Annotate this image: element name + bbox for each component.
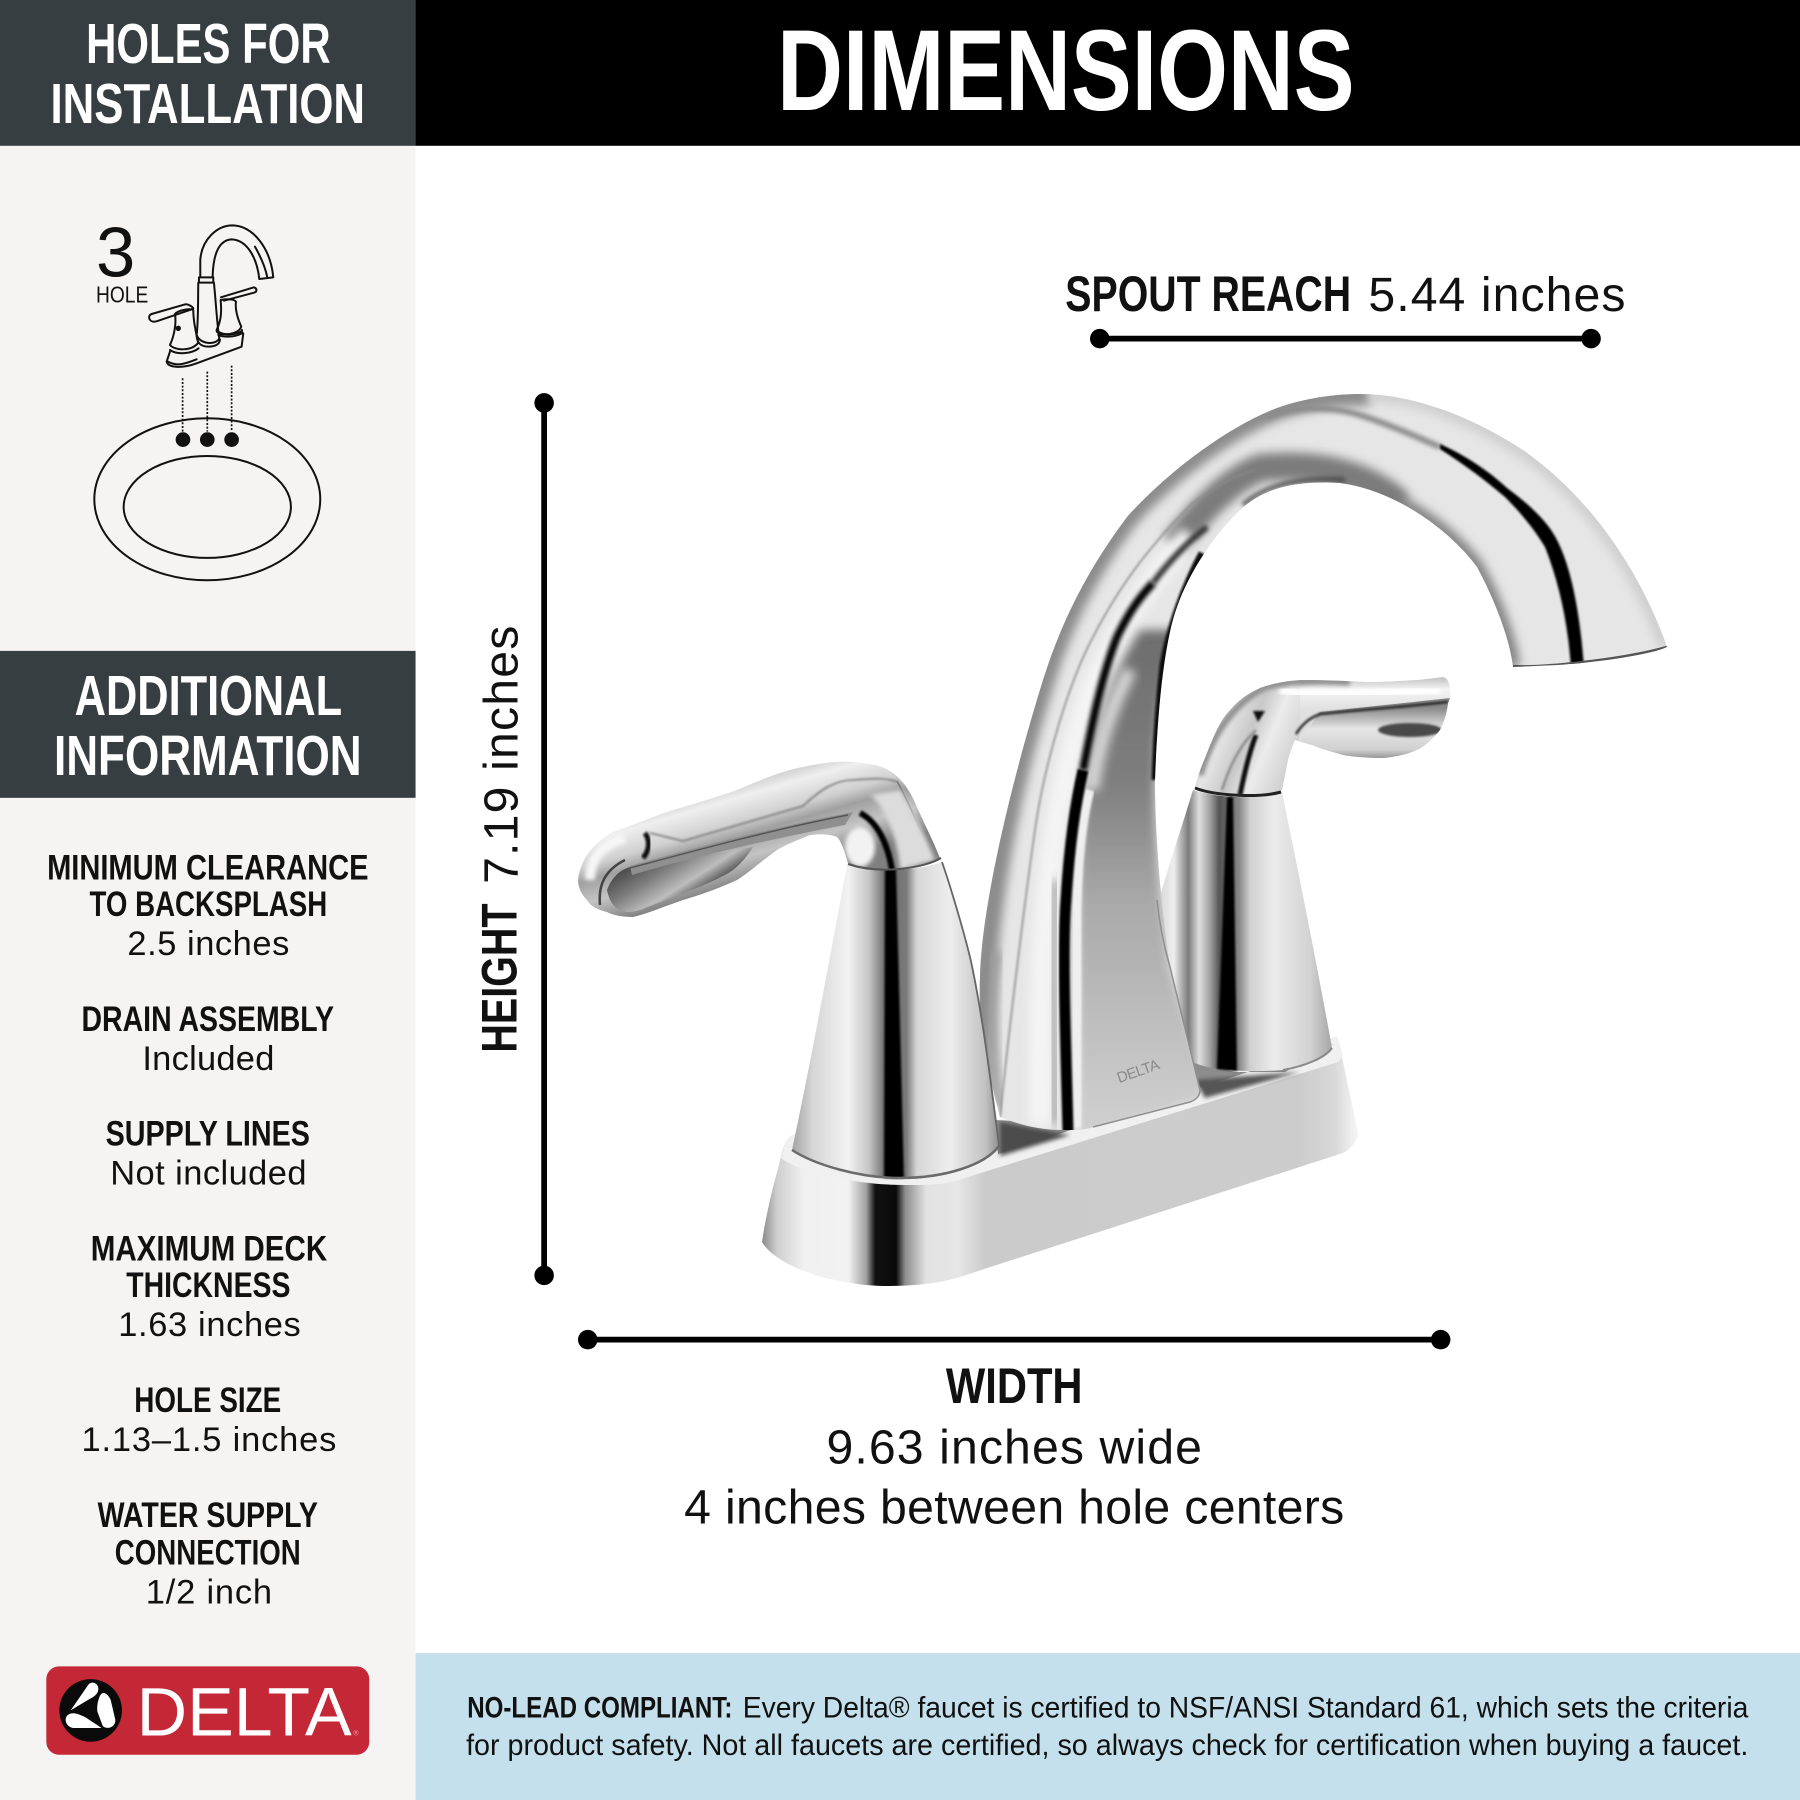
spec: maximum deck thickness: 1.63 inches [118, 1306, 301, 1344]
logo: delta: DELTA [137, 1674, 352, 1751]
spec: water supply connection: 1/2 inch [146, 1574, 272, 1612]
spec: maximum deck thickness: MAXIMUM DECK [91, 1228, 327, 1268]
heading: holes for installation: INSTALLATION [51, 72, 365, 135]
spec: minimum clearance [47, 847, 368, 963]
dimension: height: 7.19 inches [475, 626, 529, 884]
heading: additional information: INFORMATION [54, 724, 362, 787]
icon: three hole faucet installation: HOLE [96, 281, 148, 307]
heading: holes for installation: HOLES FOR [86, 12, 331, 75]
spec: minimum clearance: 2.5 inches [127, 925, 289, 963]
spec: drain assembly [82, 999, 334, 1078]
spec: hole size [82, 1380, 336, 1459]
spec: drain assembly: Included [142, 1040, 274, 1078]
dimension: height [471, 393, 554, 1285]
panel: left sidebar [0, 0, 416, 1800]
faucet logo text: DELTA [1115, 1056, 1162, 1087]
spec: hole size: HOLE SIZE [134, 1380, 281, 1420]
spec: minimum clearance: MINIMUM CLEARANCE [47, 847, 368, 887]
spec: hole size: 1.13–1.5 inches [82, 1421, 336, 1459]
spec: supply lines [106, 1114, 310, 1193]
right handle [1190, 677, 1450, 800]
left handle [578, 762, 941, 917]
dimension: width: WIDTH [946, 1357, 1083, 1414]
dimension: width: 4 inches between hole centers [684, 1480, 1344, 1534]
spec: water supply connection: WATER SUPPLY [98, 1495, 318, 1535]
panel: no-lead compliant note [416, 1653, 1800, 1800]
spec: supply lines: SUPPLY LINES [106, 1114, 310, 1154]
logo: delta: ® [353, 1729, 359, 1738]
spec: maximum deck thickness: THICKNESS [126, 1265, 290, 1305]
spec: water supply connection: CONNECTION [115, 1533, 301, 1573]
heading: additional information [0, 651, 416, 798]
spec: maximum deck thickness [91, 1228, 327, 1344]
panel: no-lead compliant note: NO-LEAD COMPLIANT: [467, 1691, 732, 1724]
heading: holes for installation [0, 0, 416, 146]
spec: drain assembly: DRAIN ASSEMBLY [82, 999, 334, 1039]
dimension: width [578, 1330, 1450, 1534]
title: dimensions: DIMENSIONS [777, 7, 1355, 135]
panel: no-lead compliant note: for product safety. Not all faucets are certified, so always check for certification when buying a faucet. [466, 1729, 1748, 1762]
icon: three hole faucet installation [94, 213, 320, 580]
dimension: spout reach: 5.44 inches [1368, 268, 1626, 322]
faucet base plate [762, 1036, 1358, 1286]
title: dimensions [416, 0, 1800, 146]
dimension: width: 9.63 inches wide [827, 1421, 1202, 1475]
icon: three hole faucet installation: 3 [96, 213, 135, 292]
left cone [792, 862, 999, 1178]
right cone [1150, 790, 1332, 1071]
spout [980, 394, 1667, 1135]
product photo: chrome faucet [578, 394, 1667, 1286]
dimension: spout reach: SPOUT REACH [1065, 265, 1351, 322]
spec: water supply connection [98, 1495, 318, 1612]
panel: no-lead compliant note: Every Delta® faucet is certified to NSF/ANSI Standard 61, which sets the criteria [743, 1691, 1749, 1724]
spec: supply lines: Not included [110, 1155, 307, 1193]
dimension: height: HEIGHT [471, 903, 528, 1053]
dimension: spout reach [1065, 265, 1626, 348]
spec: minimum clearance: TO BACKSPLASH [90, 884, 327, 924]
logo: delta [46, 1666, 369, 1755]
heading: additional information: ADDITIONAL [75, 664, 342, 727]
